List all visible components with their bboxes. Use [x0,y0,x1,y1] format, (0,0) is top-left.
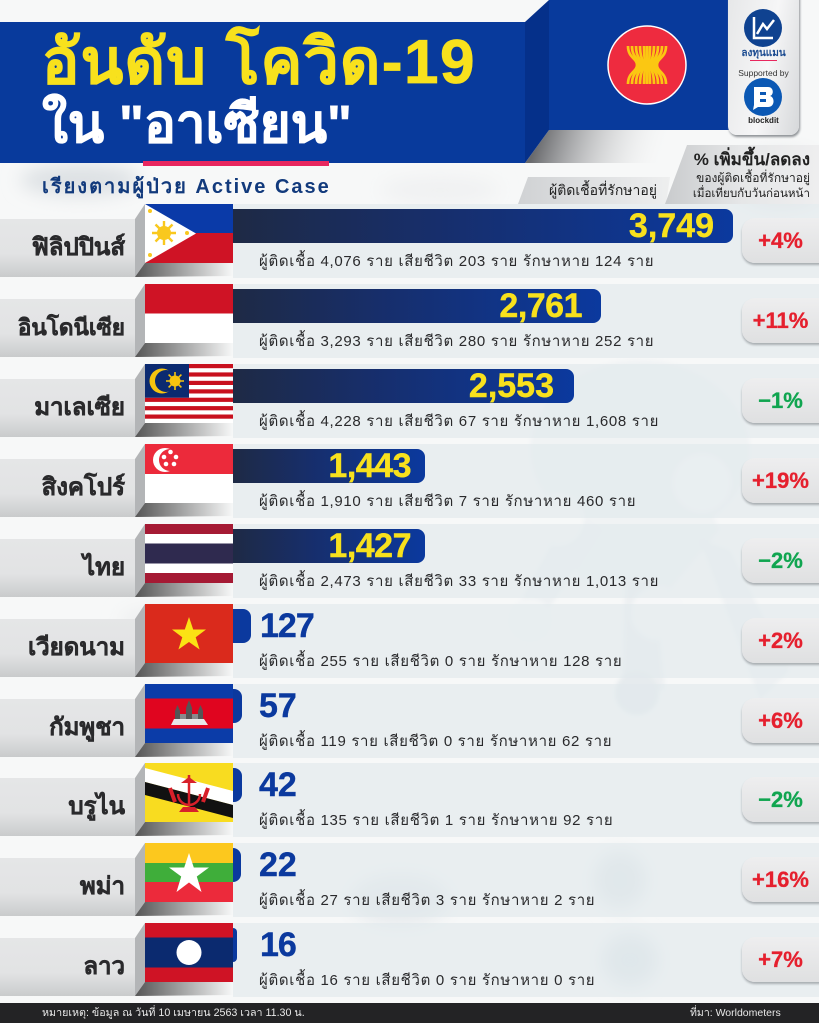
percent change [742,698,819,743]
logo text: ลงทุนแมน [741,48,786,59]
flag: Cambodia [145,684,233,743]
row: Philippines [0,204,819,278]
title line 1: อันดับ โควิด-19 [42,28,476,97]
row: Vietnam [0,604,819,678]
footer [0,1003,819,1023]
flag: Malaysia [145,364,233,419]
row: Singapore [0,444,819,518]
row: Myanmar [0,843,819,917]
supported by: Supported by [738,68,789,78]
country bar [233,289,601,323]
percent change [742,298,819,343]
country name: เวียดนาม [28,634,125,661]
active case value: 127 [260,607,314,645]
column header: active cases: ผู้ติดเชื้อที่รักษาอยู่ [549,182,657,198]
active case value: 2,761 [499,287,582,325]
country bar [233,369,574,403]
footnote: หมายเหตุ: ข้อมูล ณ วันที่ 10 เมษายน 2563 เวลา 11.30 น. [42,1007,305,1019]
country name: กัมพูชา [49,714,125,741]
case details: ผู้ติดเชื้อ 2,473 ราย เสียชีวิต 33 ราย รักษาหาย 1,013 ราย [259,573,659,590]
percent change: −1% [758,388,803,413]
active case value: 1,427 [328,527,411,565]
country bar [233,848,241,882]
flag: Philippines [145,204,233,263]
flag: Thailand [145,524,233,583]
active case value: 42 [259,766,297,804]
logo panel [728,0,799,135]
row: Cambodia [0,684,819,758]
active case value: 22 [259,846,297,884]
percent change [742,937,819,982]
country name: ฟิลิปปินส์ [32,234,125,261]
column header: percent change [665,145,819,204]
country name: ไทย [83,554,125,581]
country bar [233,928,237,962]
icon: chart logo [744,9,782,47]
case details: ผู้ติดเชื้อ 4,228 ราย เสียชีวิต 67 ราย รักษาหาย 1,608 ราย [259,413,659,430]
case details: ผู้ติดเชื้อ 119 ราย เสียชีวิต 0 ราย รักษาหาย 62 ราย [259,733,612,750]
percent change [742,538,819,583]
icon: blockdit logo [744,78,782,116]
percent change [742,458,819,503]
country bar [233,209,733,243]
case details: ผู้ติดเชื้อ 1,910 ราย เสียชีวิต 7 ราย รักษาหาย 460 ราย [259,493,636,510]
row: Thailand [0,524,819,598]
country bar [233,768,242,802]
case details: ผู้ติดเชื้อ 27 ราย เสียชีวิต 3 ราย รักษาหาย 2 ราย [259,892,595,909]
percent change: +7% [758,947,803,972]
flag: Indonesia [145,284,233,314]
column header: percent change: เมื่อเทียบกับวันก่อนหน้า [693,187,810,200]
country bar [233,609,251,643]
column header: active cases [518,177,670,204]
percent change: +16% [752,867,809,892]
row: Laos [0,923,819,997]
percent change: −2% [758,548,803,573]
percent change: +11% [753,308,808,333]
row: Malaysia [0,364,819,438]
percent change: −2% [758,787,803,812]
row: Indonesia [0,284,819,358]
country name: ลาว [83,953,125,980]
case details: ผู้ติดเชื้อ 4,076 ราย เสียชีวิต 203 ราย รักษาหาย 124 ราย [259,253,654,270]
percent change [742,378,819,423]
country bar [233,689,242,723]
column header: percent change: % เพิ่มขึ้น/ลดลง [694,150,810,169]
active case value: 3,749 [629,207,714,245]
country name: อินโดนีเซีย [18,315,125,340]
active case value: 2,553 [469,367,554,405]
percent change: +6% [758,708,803,733]
column header: percent change: ของผู้ติดเชื้อที่รักษาอยู่ [696,171,810,185]
flag: Laos [145,923,233,982]
flag: Brunei [145,763,233,822]
country name: สิงคโปร์ [42,474,125,501]
percent change [742,218,819,263]
country bar [233,449,425,483]
header: title banner [0,22,525,163]
flag: Myanmar [145,843,233,902]
active case value: 57 [259,687,297,725]
source: ที่มา: Worldometers [690,1007,781,1019]
percent change [742,777,819,822]
active case value: 1,443 [328,447,411,485]
header: ASEAN panel with emblem [525,0,729,163]
blockdit text: blockdit [748,116,779,125]
percent change: +2% [758,628,803,653]
case details: ผู้ติดเชื้อ 135 ราย เสียชีวิต 1 ราย รักษาหาย 92 ราย [259,812,613,829]
percent change [742,857,819,902]
flag: Singapore [145,444,233,474]
title underline [143,161,329,166]
subtitle: เรียงตามผู้ป่วย Active Case [42,176,331,198]
active case value: 16 [260,926,296,964]
case details: ผู้ติดเชื้อ 16 ราย เสียชีวิต 0 ราย รักษาหาย 0 ราย [259,972,595,989]
percent change: +4% [758,228,803,253]
country bar [233,529,425,563]
case details: ผู้ติดเชื้อ 3,293 ราย เสียชีวิต 280 ราย รักษาหาย 252 ราย [259,333,654,350]
logo underline [750,60,777,61]
title line 2: ใน "อาเซียน" [42,95,352,154]
percent change: +19% [752,468,809,493]
percent change [742,618,819,663]
flag: Vietnam [145,604,233,663]
row: Brunei [0,763,819,837]
country name: มาเลเซีย [34,394,125,421]
country name: บรูไน [68,793,125,820]
country name: พม่า [80,873,125,900]
case details: ผู้ติดเชื้อ 255 ราย เสียชีวิต 0 ราย รักษาหาย 128 ราย [259,653,622,670]
